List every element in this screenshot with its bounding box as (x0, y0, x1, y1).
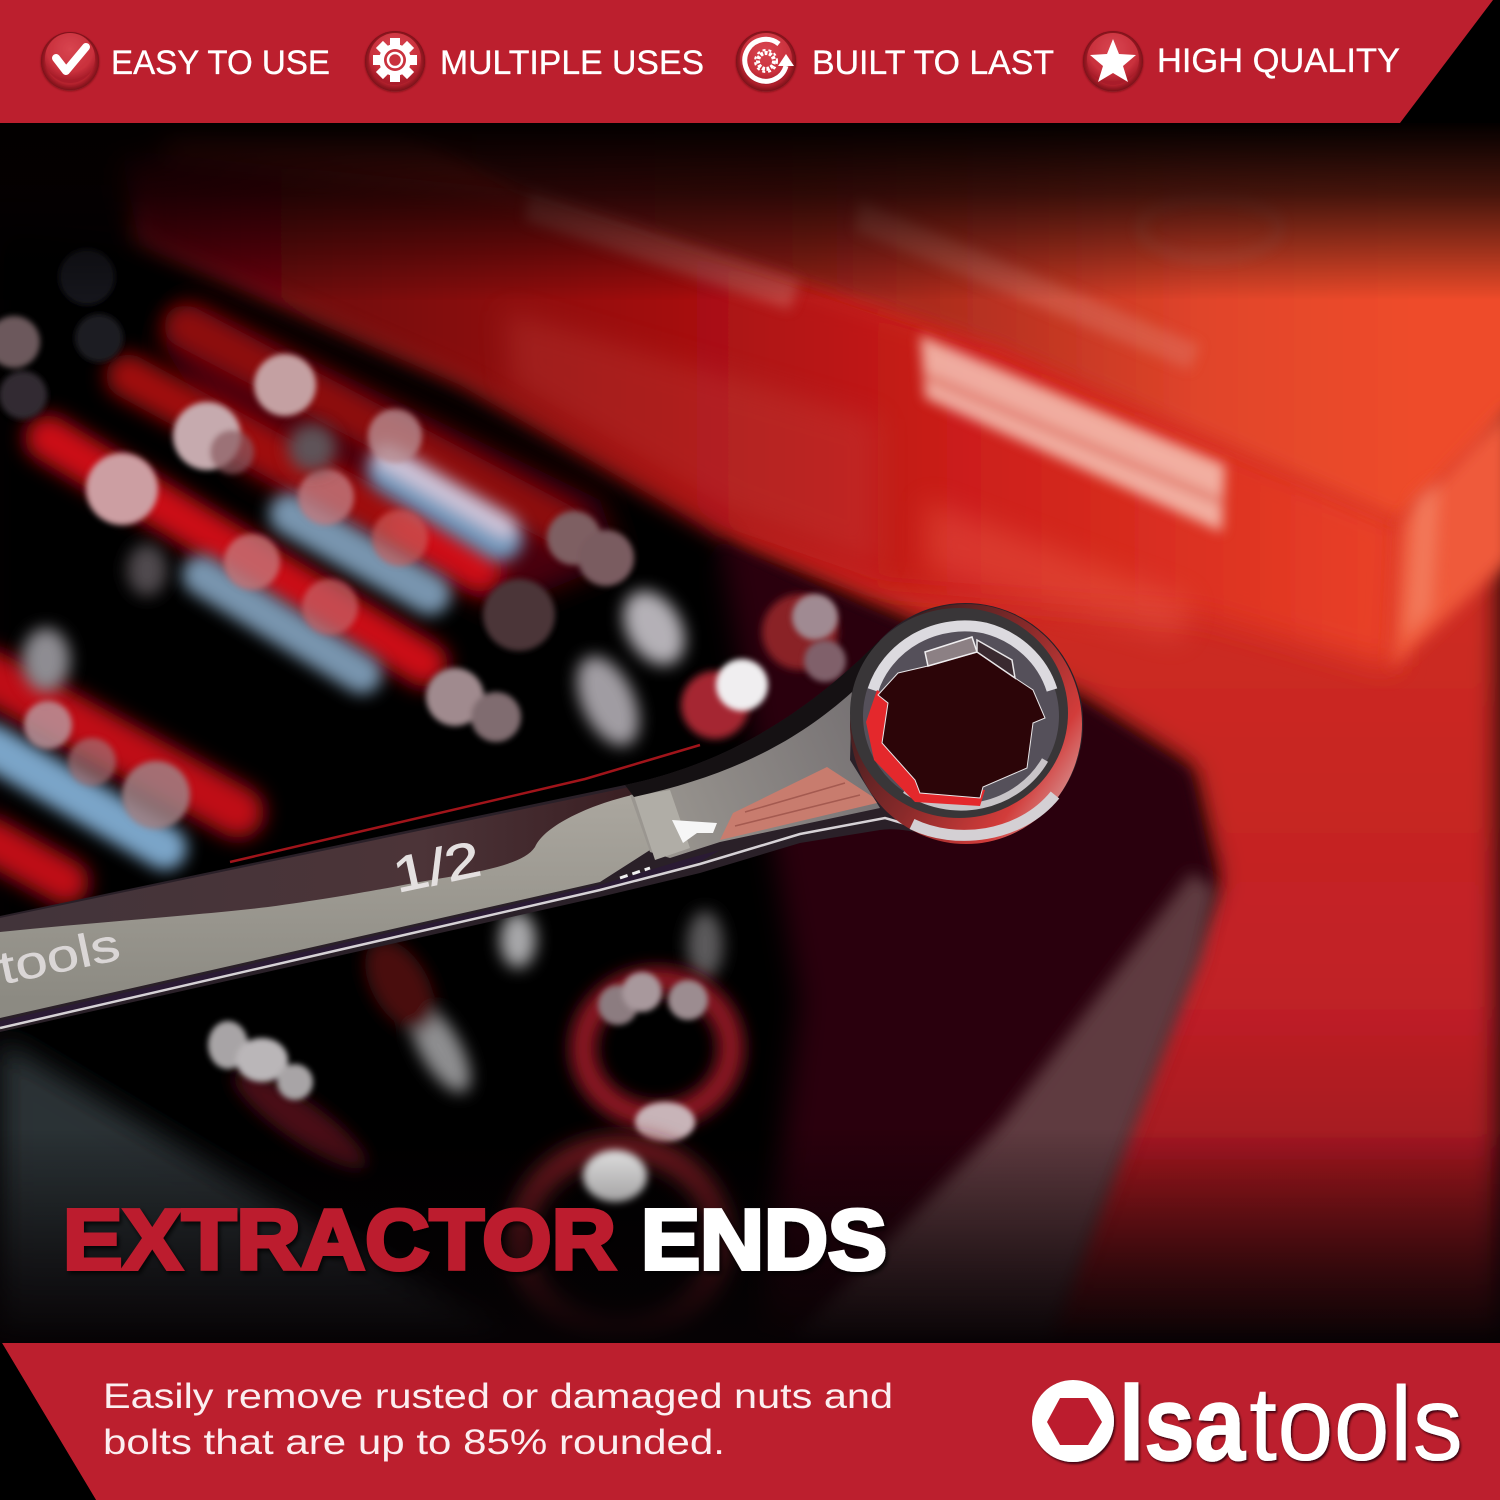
red inner wall (866, 690, 985, 806)
corner highlight (1405, 480, 1440, 640)
extractor tooth top (925, 637, 977, 666)
tray wall (833, 868, 1224, 1315)
label: multiple uses: MULTIPLE USES (440, 44, 704, 82)
shaft light lower reflection (0, 795, 650, 1018)
logo: Olsatools: O (1038, 1367, 1108, 1483)
wrench thin red reflection line (230, 745, 700, 862)
description text: bolts that are up to 85% rounded. (103, 1423, 725, 1462)
case lid (464, 138, 1500, 519)
case corner side (1392, 405, 1500, 668)
icon: cycle gear (736, 31, 796, 91)
hole: extractor profile (878, 652, 1045, 798)
bottom silver rim (912, 795, 1055, 835)
lower shaft dark groove (0, 850, 720, 1028)
red case body (140, 120, 1500, 1343)
faint pale patch on front strip (505, 310, 880, 570)
wrench (0, 603, 1083, 1032)
background bokeh near wrench head (681, 594, 846, 739)
left tray dark area (125, 236, 810, 1302)
icon: star (1083, 31, 1143, 91)
blurred sockets (520, 972, 731, 1332)
blurred bolts below wrench (208, 1021, 313, 1100)
label: built to last: BUILT TO LAST (812, 44, 1054, 82)
wrench body silhouette (0, 603, 1083, 1032)
neck crease bright (634, 790, 690, 860)
logo: Olsatools (1032, 1365, 1463, 1483)
blurred wrench red bars (0, 326, 560, 882)
bottom banner (0, 1343, 1500, 1500)
icon: check (41, 32, 99, 90)
headline red word: EXTRACTOR (63, 1193, 616, 1288)
logo: Olsatools: tools (1249, 1365, 1463, 1483)
icon: gear (365, 31, 425, 91)
label: high quality: HIGH QUALITY (1157, 42, 1400, 80)
dark tray interior (714, 532, 1226, 1302)
upper dark band of neck (625, 640, 880, 797)
extractor tooth right (977, 640, 1015, 678)
wrench neck (630, 690, 880, 858)
white glint (672, 820, 717, 843)
ring top highlight (873, 626, 1052, 690)
headline white word: ENDS (641, 1193, 887, 1288)
stamp: 1/2: 1/2 (388, 830, 486, 904)
headline (63, 1193, 887, 1288)
ring head outer rim (850, 604, 1082, 844)
description text: Easily remove rusted or damaged nuts and (103, 1377, 893, 1416)
label: easy to use: EASY TO USE (111, 44, 330, 82)
blurred case lettering (525, 190, 1280, 532)
case front strip (120, 150, 1400, 668)
lower-left tray grey (0, 1038, 426, 1312)
ring silver band (863, 623, 1059, 809)
dull red haze behind wrench bars (160, 300, 620, 610)
top and bottom dark fades (0, 120, 1500, 300)
top banner (0, 0, 1493, 123)
pink reflection groove lines (735, 783, 860, 826)
description text (103, 1377, 893, 1462)
logo: Olsatools: lsa (1119, 1365, 1246, 1483)
ring dark band (850, 608, 1068, 818)
blurred blue highlights (0, 456, 505, 848)
pink reflection (720, 767, 877, 840)
lower shaft bright edge (0, 818, 960, 1028)
ring bottom highlight (905, 760, 1045, 807)
chip glints on edge (620, 868, 650, 878)
shaft dark upper reflection (0, 787, 640, 1000)
blurred bokeh highlights (0, 249, 634, 829)
blurred grey glints (22, 424, 723, 1182)
black corner (0, 1343, 96, 1500)
